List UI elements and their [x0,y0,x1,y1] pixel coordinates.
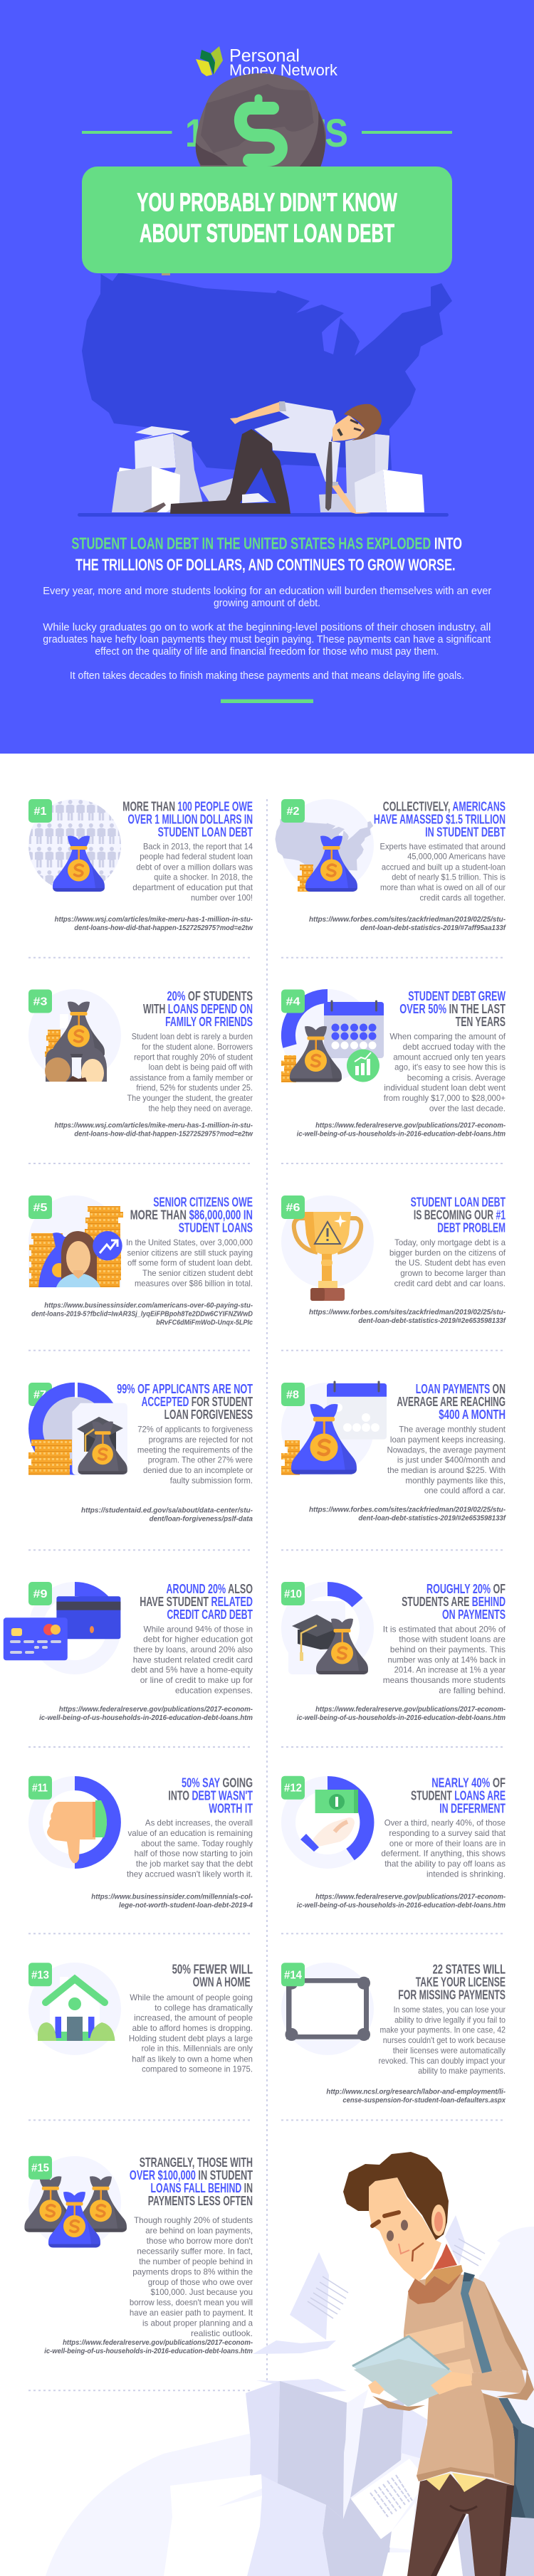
text block: hero introduction: While lucky graduates go on to work at the beginning-level positions of their chosen industry, all [43,622,491,633]
heading: LOAN PAYMENTS ON [416,1381,506,1396]
text block: hero introduction: effect on the quality of life and financial freedom for those who must pay them. [95,646,439,658]
body text: bigger burden on the citizens of [389,1247,506,1257]
source [44,2339,253,2355]
body text: the US. Student debt has even [395,1258,506,1268]
source: https://www.businessinsider.com/millennials-col- [91,1893,253,1901]
body text [127,1817,253,1879]
badge #6: #6 [286,1202,300,1214]
body text: borrow less, doesn't mean you will [130,2298,253,2308]
body text [379,2005,506,2076]
source: ic-well-being-of-us-households-in-2016-education-debt-loans.htm [39,1714,253,1722]
source: ic-well-being-of-us-households-in-2016-education-debt-loans.htm [297,1901,506,1909]
heading: OVER $100,000 IN STUDENT [130,2168,253,2182]
heading: COLLECTIVELY, AMERICANS [383,798,506,813]
heading: LOAN FORGIVENESS [164,1407,253,1422]
body text: assistance from a family member or [130,1072,253,1082]
icon: house [28,1963,121,2055]
source: http://www.ncsl.org/research/labor-and-employment/li- [326,2089,506,2096]
icon: calendar, ring chart, money bag and growth badge [281,989,384,1082]
heading [122,798,253,839]
panel: fact 5 [28,1195,253,1326]
body text [389,1237,506,1289]
body text: Nowadays, the average payment [387,1445,506,1455]
source: dent-loan-debt-statistics-2019/#2e653598133f [358,1515,507,1523]
body text: have an easier path to payment. It [130,2308,253,2318]
body text: accrued and built up a student-loan [382,862,506,872]
source: https://www.federalreserve.gov/publications/2017-econom- [315,1706,506,1714]
text block: hero headline [71,534,462,574]
body text: report that roughly 20% of student [134,1052,253,1062]
body text: senior citizens are still stuck paying [127,1247,253,1257]
heading [402,1581,506,1622]
body text: credit cards all together. [420,892,506,902]
body text: It is estimated that about 20% of [383,1624,506,1634]
body text: programs are rejected for not [149,1435,253,1445]
source: https://studentaid.ed.gov/sa/about/data-center/stu- [81,1506,253,1514]
source: dent/loan-forgiveness/pslf-data [150,1515,253,1523]
heading: INTO DEBT WASN'T [168,1788,253,1802]
source [309,1309,507,1325]
source: dent-loans-how-did-that-happen-1527252975?mod=e2tw [74,924,253,932]
heading: LOANS FALL BEHIND IN [151,2180,253,2195]
body text: able to afford homes is dropping. [132,2023,253,2033]
badge #10: #10 [284,1588,302,1600]
icon: license certificate frame [281,1963,374,2055]
body text: people had federal student loan [140,852,253,862]
badge #7: #7 [33,1389,46,1401]
body text: the number of people behind in [139,2256,253,2266]
heading: 50% SAY GOING [182,1775,253,1790]
heading [398,1962,506,2002]
source: ic-well-being-of-us-households-in-2016-education-debt-loans.htm [44,2348,253,2355]
heading [397,1381,506,1422]
source: https://www.forbes.com/sites/zackfriedman/2019/02/25/stu- [309,1506,506,1514]
body text: number over 100! [191,892,253,902]
body text: intended is shrinking. [426,1869,506,1879]
icon: three money bags [24,2156,127,2249]
icon: trophy with warning sign [281,1195,374,1301]
source [309,916,507,932]
body text: that the ability to pay off loans as [384,1859,506,1869]
body text: quite a shocker. In 2018, the [154,872,253,882]
badge #12 [281,1776,305,1800]
badge #7 [28,1383,52,1406]
panel: fact 15 [24,2155,253,2355]
badge #8: #8 [286,1389,299,1401]
dividers [28,799,506,2390]
heading: WITH LOANS DEPEND ON [143,1001,253,1016]
body text [127,1032,253,1113]
body text: Today, only mortgage debt is a [394,1237,506,1247]
heading: 22 STATES WILL [433,1962,506,1977]
body text: number was only at 14% back in [387,1654,506,1664]
body text: is about proper planning and a [142,2318,253,2328]
source [297,1121,506,1138]
heading [172,1962,253,1990]
body text: becoming a crisis. Average [407,1072,506,1082]
body text: realistic outlook. [191,2328,253,2338]
source: dent-loans-2019-5?fbclid=IwAR3Sj_lyqEiFPBpoh8Te2DDw6CYIFNZWwD [31,1310,253,1318]
heading: TEN YEARS [456,1014,506,1029]
source: cense-suspension-for-student-loan-defaulters.aspx [342,2097,506,2105]
icon: money bag over US map [275,799,374,892]
body text: they accrued wasn't likely worth it. [127,1869,253,1879]
body text: are falling behind. [439,1686,506,1696]
badge #5: #5 [33,1202,48,1214]
body text: friend, 52% for students under 25. [136,1083,253,1093]
body text [132,841,253,902]
body text: Holding student debt plays a large [129,2033,253,2043]
source [31,1302,253,1326]
source: https://www.businessinsider.com/americans-over-60-paying-stu- [44,1302,253,1309]
body text [131,1624,253,1696]
chart: 50 percent ring with thumbs down [36,1783,114,1863]
body text [384,1032,506,1113]
body text: behind on their payments. This [390,1645,506,1654]
heading: STRANGELY, THOSE WITH [140,2155,253,2170]
body text: In some states, you can lose your [394,2005,506,2015]
body text: means thousands more students [383,1675,506,1685]
badge #10 [281,1582,305,1605]
heading: CREDIT CARD DEBT [167,1607,253,1622]
body text: As debt increases, the overall [145,1817,253,1827]
panel: fact 9 [4,1581,253,1722]
heading [168,1775,253,1815]
source: https://www.wsj.com/articles/mike-meru-has-1-million-in-stu- [55,916,253,924]
body text: Experts have estimated that around [380,841,506,851]
heading: STUDENTS ARE BEHIND [402,1594,506,1609]
logo: Personal Money Network: Personal [229,46,300,66]
panel: fact 14 [281,1962,506,2105]
body text: ability to drive legally if you fail to [394,2015,506,2025]
body text: nurses couldn't get to work because [383,2035,506,2045]
heading [140,1581,253,1622]
body text: their licenses were automatically [393,2045,506,2055]
body text: make your payments. In one case, 42 [380,2025,506,2035]
logo: Personal Money Network: Money Network [229,61,338,79]
text block: hero introduction: It often takes decades to finish making these payments and that means delaying life goals. [70,670,464,682]
heading: ROUGHLY 20% OF [426,1581,506,1596]
heading [411,1195,506,1235]
title banner [82,167,452,275]
source: dent-loans-how-did-that-happen-1527252975?mod=e2tw [74,1130,253,1138]
body text: grown to become larger than [400,1268,506,1278]
panel: fact 1 [28,798,253,932]
heading [411,1775,506,1815]
illustration: man crawling among stacks of paperwork [78,401,449,517]
text block: hero introduction: graduates have hefty loan payments they must begin paying. These payments can have a significant [43,634,491,645]
badge #14: #14 [284,1969,302,1981]
heading [130,1195,253,1235]
body text: Student loan debt is rarely a burden [132,1032,253,1042]
icon: senior woman with coin stacks and rising arrow [28,1195,123,1287]
heading [130,2155,253,2208]
body text: loan payment keeps increasing. [390,1435,506,1445]
heading: 15 facts with side rules [82,110,452,155]
source [297,1893,506,1909]
badge #3 [28,989,52,1013]
body text: for the student alone. Borrowers [142,1042,253,1052]
body text: responding to a survey said that [389,1828,506,1838]
heading: OVER 1 MILLION DOLLARS IN [128,811,253,826]
icon: family members behind money bag [28,989,121,1087]
body text: those with student loans are [399,1635,506,1645]
panel: fact 2 [275,798,507,932]
panel: fact 13 [28,1962,253,2074]
badge #8 [281,1383,305,1406]
heading: SENIOR CITIZENS OWE [153,1195,253,1210]
text block: hero introduction: growing amount of debt. [214,598,320,609]
heading: PAYMENTS LESS OFTEN [148,2193,253,2208]
body text: Though roughly 20% of students [134,2215,253,2225]
body text: more than what is owed on all of our [380,882,506,892]
body text: ago, it's easy to see how this is [394,1062,506,1072]
source: https://www.forbes.com/sites/zackfriedman/2019/02/25/stu- [309,1309,506,1316]
heading: STUDENT LOANS [179,1220,253,1235]
heading: $400 A MONTH [439,1407,506,1422]
badge #9 [28,1582,52,1605]
source: dent-loan-debt-statistics-2019/#7aff95aa133f [360,924,507,932]
heading [374,798,506,839]
accent bar [221,700,313,703]
body text: those who borrow more don't [147,2236,253,2246]
badge #1 [28,799,52,823]
body text: ability to make payments. [418,2066,506,2076]
panel: fact 11 [28,1775,253,1909]
source [81,1506,253,1523]
map: United States silhouette [82,273,452,498]
body text: necessarily suffer more. In fact, [137,2246,253,2256]
source: https://www.federalreserve.gov/publications/2017-econom- [315,1893,506,1901]
source: https://www.federalreserve.gov/publications/2017-econom- [59,1706,253,1714]
body text: have student related credit card [133,1654,253,1664]
source [55,916,253,932]
body text: measures over $86 billion in total. [135,1279,253,1289]
logo: Personal Money Network [196,46,338,79]
body text: half of those now starting to join [134,1849,253,1859]
body text: The average monthly student [399,1425,506,1435]
panel: fact 6 [281,1195,507,1325]
badge #11: #11 [32,1783,48,1795]
body text: there by loans, around 20% also [134,1645,253,1654]
badge #14 [281,1963,305,1986]
panel: fact 3 [28,988,253,1138]
body text: group of those who owe over [148,2277,253,2287]
chart: 40 percent ring with hand holding banknote [288,1783,367,1862]
badge #3: #3 [33,996,48,1008]
body text [130,2215,253,2338]
body text: payments drops to 8% within the [132,2266,253,2276]
source [55,1121,253,1138]
icon: money bag over crowd of people [28,799,121,892]
body text [137,1425,253,1485]
text block: hero introduction: Every year, more and more students looking for an education will burden themselves with an ever [43,586,491,597]
body text: Over a third, nearly 40%, of those [384,1817,506,1827]
body text: The senior citizen student debt [142,1268,253,1278]
body text: debt and 5% have a home-equity [131,1665,253,1675]
body text: off some form of student loan debt. [127,1258,253,1268]
icon: calendar with money bag [281,1382,387,1475]
source: ic-well-being-of-us-households-in-2016-education-debt-loans.htm [297,1130,506,1138]
body text: The younger the student, the greater [127,1093,253,1103]
body text: debt of over a million dollars was [136,862,253,872]
body text: the median is around $225. With [387,1465,506,1475]
heading: 50% FEWER WILL [172,1962,253,1977]
body text: While the amount of people going [130,1992,253,2002]
heading: OWN A HOME [193,1975,251,1990]
body text [381,1817,506,1879]
heading: 99% OF APPLICANTS ARE NOT [117,1381,253,1396]
heading [117,1381,253,1422]
body text: 72% of applicants to forgiveness [137,1425,253,1435]
panel: fact 4 [281,988,506,1138]
badge #12: #12 [284,1783,302,1795]
body text: When comparing the amount of [389,1032,506,1042]
body text: 45,000,000 Americans have [407,852,506,862]
body text: the job market say that the debt [136,1859,253,1869]
source: lege-not-worth-student-loan-debt-2019-4 [119,1901,253,1909]
source [326,2089,506,2105]
body text: department of education put that [132,882,253,892]
badge #9: #9 [33,1588,48,1600]
heading: HAVE STUDENT RELATED [140,1594,253,1609]
body text: value of an education is remaining [128,1828,253,1838]
panel: fact 7 [28,1381,253,1523]
heading: STUDENT LOAN DEBT [158,824,253,839]
badge #11 [28,1776,52,1800]
heading [143,988,253,1029]
heading: NEARLY 40% OF [431,1775,506,1790]
body text: over the last decade. [429,1103,506,1113]
body text: half as likely to own a home when [132,2054,253,2064]
heading: MORE THAN $86,000,000 IN [130,1208,253,1223]
body text: meeting the requirements of the [137,1445,253,1455]
body text: are behind on loan payments, [145,2226,253,2236]
body text: debt accrued today with the [403,1042,506,1052]
source: https://www.wsj.com/articles/mike-meru-has-1-million-in-stu- [55,1121,253,1129]
body text [129,1992,253,2074]
heading: OVER 50% IN THE LAST [399,1001,506,1016]
source [39,1706,253,1722]
icon: boulder with dollar sign [196,73,326,169]
body text [126,1237,253,1289]
panel: fact 8 [281,1381,507,1523]
heading: AROUND 20% ALSO [167,1581,253,1596]
source: dent-loan-debt-statistics-2019/#2e653598133f [358,1317,507,1325]
heading: WORTH IT [209,1800,253,1815]
heading: MORE THAN 100 PEOPLE OWE [122,798,253,813]
heading: 15 facts with side rules: 15 FACTS [185,110,348,155]
badge #1: #1 [34,806,47,818]
body text: about the same. Today roughly [141,1838,253,1848]
panel: fact 10 [281,1581,506,1722]
badge #5 [28,1195,52,1219]
body text: to college has dramatically [155,2002,253,2012]
source: https://www.forbes.com/sites/zackfriedman/2019/02/25/stu- [309,916,506,924]
body text: compared to someone in 1975. [142,2064,253,2074]
body text: program. The other 27% were [148,1455,253,1465]
body text: While around 94% of those in [144,1624,253,1634]
chart: 99 percent ring with document and graduation bag [28,1382,127,1475]
heading: ON PAYMENTS [442,1607,506,1622]
body text: increased, the amount of people [134,2013,253,2023]
source [297,1706,506,1722]
heading: FAMILY OR FRIENDS [165,1014,253,1029]
body text: the help they need on average. [149,1103,253,1113]
heading: 20% OF STUDENTS [167,988,253,1003]
panel: fact 12 [281,1775,506,1909]
source [309,1506,507,1523]
heading: IS BECOMING OUR #1 [414,1208,506,1223]
body text: In the United States, over 3,000,000 [126,1237,253,1247]
source: bRvFC6dMiFmWoD-Unqx-5LPIc [156,1319,253,1326]
body text: is just under $400/month and [397,1455,506,1465]
source: https://www.federalreserve.gov/publications/2017-econom- [63,2339,253,2347]
heading [399,988,506,1029]
body text [387,1425,506,1496]
body text: deferment. If anything, this shows [381,1849,506,1859]
illustration: student reading beside paper stacks [46,2152,534,2576]
body text: credit card debt and car loans. [394,1279,506,1289]
body text: one could afford a car. [424,1486,506,1496]
badge #4: #4 [286,996,300,1008]
badge #15 [28,2156,52,2180]
body text: debt for higher education got [143,1635,253,1645]
source: https://www.federalreserve.gov/publications/2017-econom- [315,1121,506,1129]
body text: one or more of their loans are in [389,1838,506,1848]
body text: revoked. This can doubly impact your [379,2056,506,2066]
panel: hero background [0,0,534,754]
source [91,1893,253,1909]
title banner: ABOUT STUDENT LOAN DEBT [140,218,394,248]
badge #13: #13 [31,1969,49,1981]
badge #6 [281,1195,305,1219]
text block: hero introduction [43,586,491,682]
badge #2 [281,799,305,823]
body text: from roughly $17,000 to $28,000+ [384,1093,506,1103]
body text: 2014. An increase at 1% a year [394,1665,506,1675]
body text: amount accrued only ten years [393,1052,506,1062]
body text [383,1624,506,1696]
badge #2: #2 [286,806,300,818]
badge #13 [28,1963,52,1986]
source: ic-well-being-of-us-households-in-2016-education-debt-loans.htm [297,1714,506,1722]
body text: individual student loan debt went [384,1083,506,1093]
body text: or line of credit to make up for [140,1675,253,1685]
body text: debt of nearly $1.5 trillion. This is [392,872,506,882]
body text: faulty submission form. [170,1475,253,1485]
body text: Back in 2013, the report that 14 [143,841,253,851]
body text: education expenses. [175,1686,253,1696]
body text: denied due to an incomplete or [143,1465,253,1475]
body text: $100,000. Just because you [151,2287,253,2297]
badge #15: #15 [31,2163,49,2175]
heading: ACCEPTED FOR STUDENT [142,1394,253,1409]
title banner: YOU PROBABLY DIDN’T KNOW [137,188,397,217]
body text [380,841,506,902]
chart: 20 percent ring with credit cards [4,1589,120,1667]
badge #4 [281,989,305,1013]
heading: STUDENT LOANS ARE [411,1788,506,1802]
body text: monthly payments like this, [405,1475,506,1485]
body text: role in this. Millennials are only [142,2044,253,2054]
chart: 20 percent ring with graduation cap and bag [288,1589,368,1674]
body text: loan debt is being paid off with [149,1062,253,1072]
